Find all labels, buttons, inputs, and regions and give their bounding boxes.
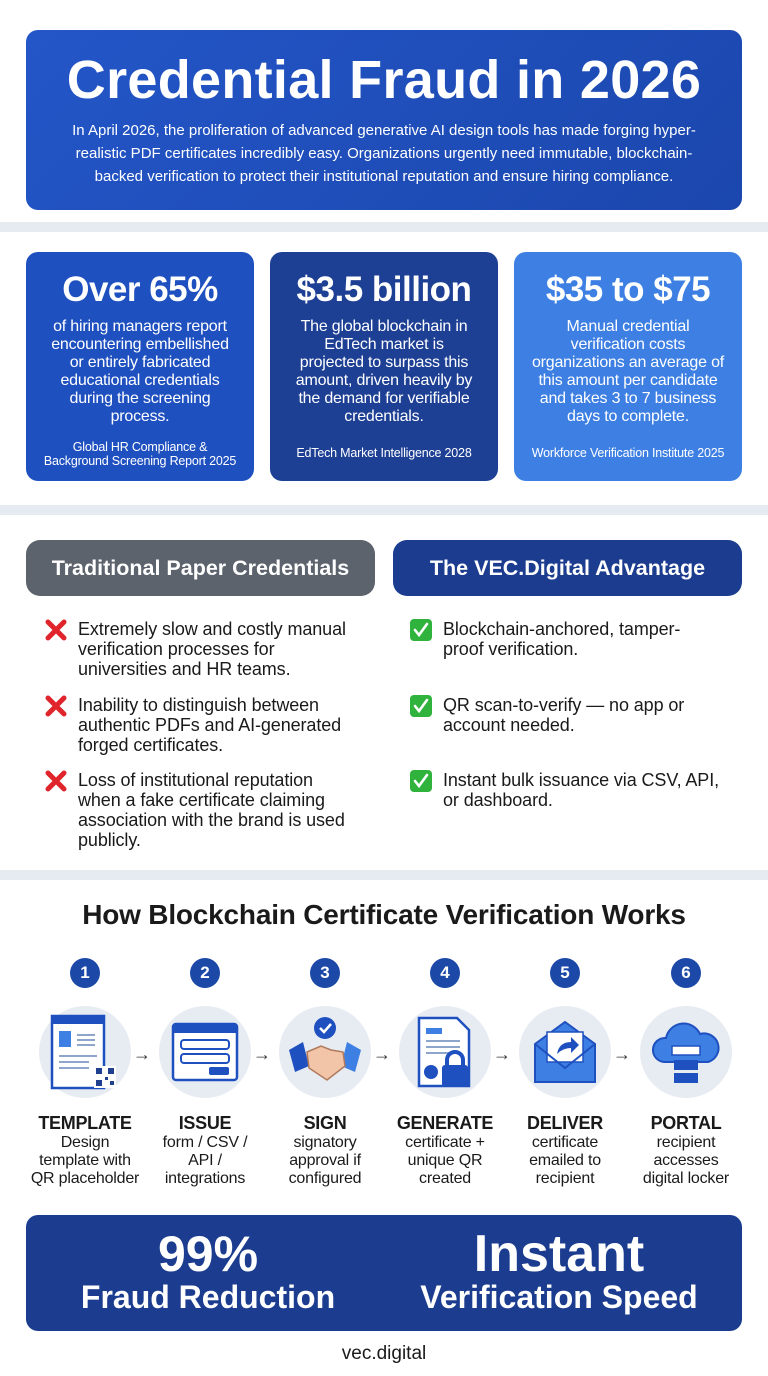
stat card: $3.5 billion: EdTech market is [324, 336, 444, 353]
bottom banner [26, 1215, 742, 1331]
arrow: → [613, 1044, 631, 1064]
step labels: ISSUE [179, 1113, 231, 1133]
con item 1: verification processes for [78, 639, 274, 659]
stat: instant: Instant [474, 1225, 644, 1283]
stat card: $35 to $75: $35 to $75 [546, 270, 710, 309]
con item 3: when a fake certificate claiming [78, 790, 325, 810]
stat card: over 65%: or entirely fabricated [70, 354, 210, 371]
step labels: GENERATE [397, 1113, 493, 1133]
step labels: API / [188, 1152, 222, 1169]
stat: 99%: 99% [158, 1226, 258, 1282]
intro text: realistic PDF certificates incredibly easy. Organizations urgently need immutable, blockchain- [76, 145, 692, 162]
step labels: recipient [536, 1170, 594, 1187]
step labels: configured [289, 1170, 361, 1187]
con item 2 [46, 695, 341, 755]
stat card: over 65%: Over 65% [62, 270, 218, 309]
step labels: certificate [532, 1134, 598, 1151]
step numbers: 5 [560, 963, 570, 982]
step numbers: 3 [320, 963, 330, 982]
step labels: template with [39, 1152, 131, 1169]
con item 2: authentic PDFs and AI-generated [78, 715, 341, 735]
step labels: emailed to [529, 1152, 601, 1169]
pro item 2: account needed. [443, 715, 575, 735]
stat card: $3.5 billion [270, 252, 498, 481]
stat card: $35 to $75: Manual credential [567, 318, 689, 335]
step labels: integrations [165, 1170, 245, 1187]
stat card: over 65%: of hiring managers report [53, 318, 227, 335]
stat card: $3.5 billion: projected to surpass this [300, 354, 468, 371]
step numbers: 6 [681, 963, 691, 982]
icon: template [39, 1006, 131, 1098]
section title: How Blockchain Certificate Verification Works [82, 899, 686, 930]
step numbers: 2 [200, 963, 210, 982]
step numbers [70, 958, 701, 988]
stat: instant: Verification Speed [420, 1279, 698, 1315]
stat card: $35 to $75: this amount per candidate [538, 372, 718, 389]
list: traditional cons [46, 619, 346, 850]
pro item 1: proof verification. [443, 639, 578, 659]
list: advantages [410, 619, 719, 810]
step labels: SIGN [304, 1113, 346, 1133]
step numbers: 4 [440, 963, 450, 982]
arrow: → [253, 1044, 271, 1064]
stat card: $35 to $75: and takes 3 to 7 business [540, 390, 716, 407]
intro text: backed verification to protect their institutional reputation and ensure hiring compliance. [95, 168, 673, 185]
stat card: over 65%: during the screening [70, 390, 210, 407]
arrow: → [133, 1044, 151, 1064]
step labels: digital locker [643, 1170, 729, 1187]
stat card: $3.5 billion: amount, driven heavily by [296, 372, 472, 389]
stat card: $35 to $75: organizations an average of [532, 354, 724, 371]
stat card: $3.5 billion: the demand for verifiable [298, 390, 470, 407]
stat card: $3.5 billion: $3.5 billion [297, 270, 471, 309]
step labels: recipient [657, 1134, 715, 1151]
con item 2: forged certificates. [78, 735, 223, 755]
step labels: created [419, 1170, 471, 1187]
step labels: accesses [653, 1152, 719, 1169]
stat card: $35 to $75: Workforce Verification Institute 2025 [532, 446, 724, 460]
stat card: over 65%: encountering embellished [51, 336, 229, 353]
step labels: DELIVER [527, 1113, 603, 1133]
stat card: over 65%: Background Screening Report 2025 [44, 454, 236, 468]
icon: sign [279, 1006, 371, 1098]
icon: issue [159, 1006, 251, 1098]
arrow: → [373, 1044, 391, 1064]
title: Credential Fraud in 2026 [67, 50, 701, 110]
step labels [31, 1113, 729, 1187]
step labels: approval if [289, 1152, 361, 1169]
step numbers: 1 [80, 963, 90, 982]
con item 1: universities and HR teams. [78, 659, 290, 679]
step labels: TEMPLATE [38, 1113, 132, 1133]
stat card: $3.5 billion: EdTech Market Intelligence 2028 [296, 446, 472, 460]
stat: 99%: Fraud Reduction [81, 1279, 335, 1315]
pro item 1 [410, 619, 680, 659]
con item 1: Extremely slow and costly manual [78, 619, 346, 639]
stat card: $35 to $75 [514, 252, 742, 481]
pill: traditional: Traditional Paper Credentials [52, 556, 349, 580]
step labels: signatory [293, 1134, 357, 1151]
step labels: form / CSV / [163, 1134, 247, 1151]
step labels: QR placeholder [31, 1170, 139, 1187]
con item 1 [46, 619, 346, 679]
con item 2: Inability to distinguish between [78, 695, 319, 715]
stat card: $3.5 billion: credentials. [344, 408, 424, 425]
con item 3: publicly. [78, 830, 141, 850]
pro item 2 [410, 695, 684, 735]
step labels: Design [61, 1134, 109, 1151]
stat card: over 65%: process. [111, 408, 169, 425]
step labels: certificate + [405, 1134, 485, 1151]
stat: instant [420, 1225, 698, 1315]
con item 3: association with the brand is used [78, 810, 345, 830]
con item 3 [46, 770, 345, 850]
icon: deliver [519, 1006, 611, 1098]
pro item 1: Blockchain-anchored, tamper- [443, 619, 680, 639]
pro item 3: or dashboard. [443, 790, 553, 810]
stat card: over 65%: Global HR Compliance & [73, 440, 207, 454]
icon: generate [399, 1006, 491, 1098]
icon: portal [640, 1006, 732, 1098]
intro text [72, 122, 696, 185]
stat card: over 65% [26, 252, 254, 481]
stat card: $3.5 billion: The global blockchain in [301, 318, 467, 335]
footer: vec.digital [342, 1343, 426, 1364]
stat card: over 65%: educational credentials [60, 372, 220, 389]
step labels: PORTAL [651, 1113, 721, 1133]
pill: advantage: The VEC.Digital Advantage [430, 556, 705, 580]
stat card: $35 to $75: verification costs [571, 336, 685, 353]
pro item 3: Instant bulk issuance via CSV, API, [443, 770, 719, 790]
pro item 3 [410, 770, 719, 810]
header panel [26, 30, 742, 210]
pro item 2: QR scan-to-verify — no app or [443, 695, 684, 715]
stat card: $35 to $75: days to complete. [567, 408, 689, 425]
stat: 99% [81, 1226, 335, 1315]
pill: advantage [393, 540, 742, 596]
arrow: → [493, 1044, 511, 1064]
step labels: unique QR [408, 1152, 482, 1169]
con item 3: Loss of institutional reputation [78, 770, 313, 790]
intro text: In April 2026, the proliferation of advanced generative AI design tools has made forging hyper- [72, 122, 696, 139]
pill: traditional [26, 540, 375, 596]
